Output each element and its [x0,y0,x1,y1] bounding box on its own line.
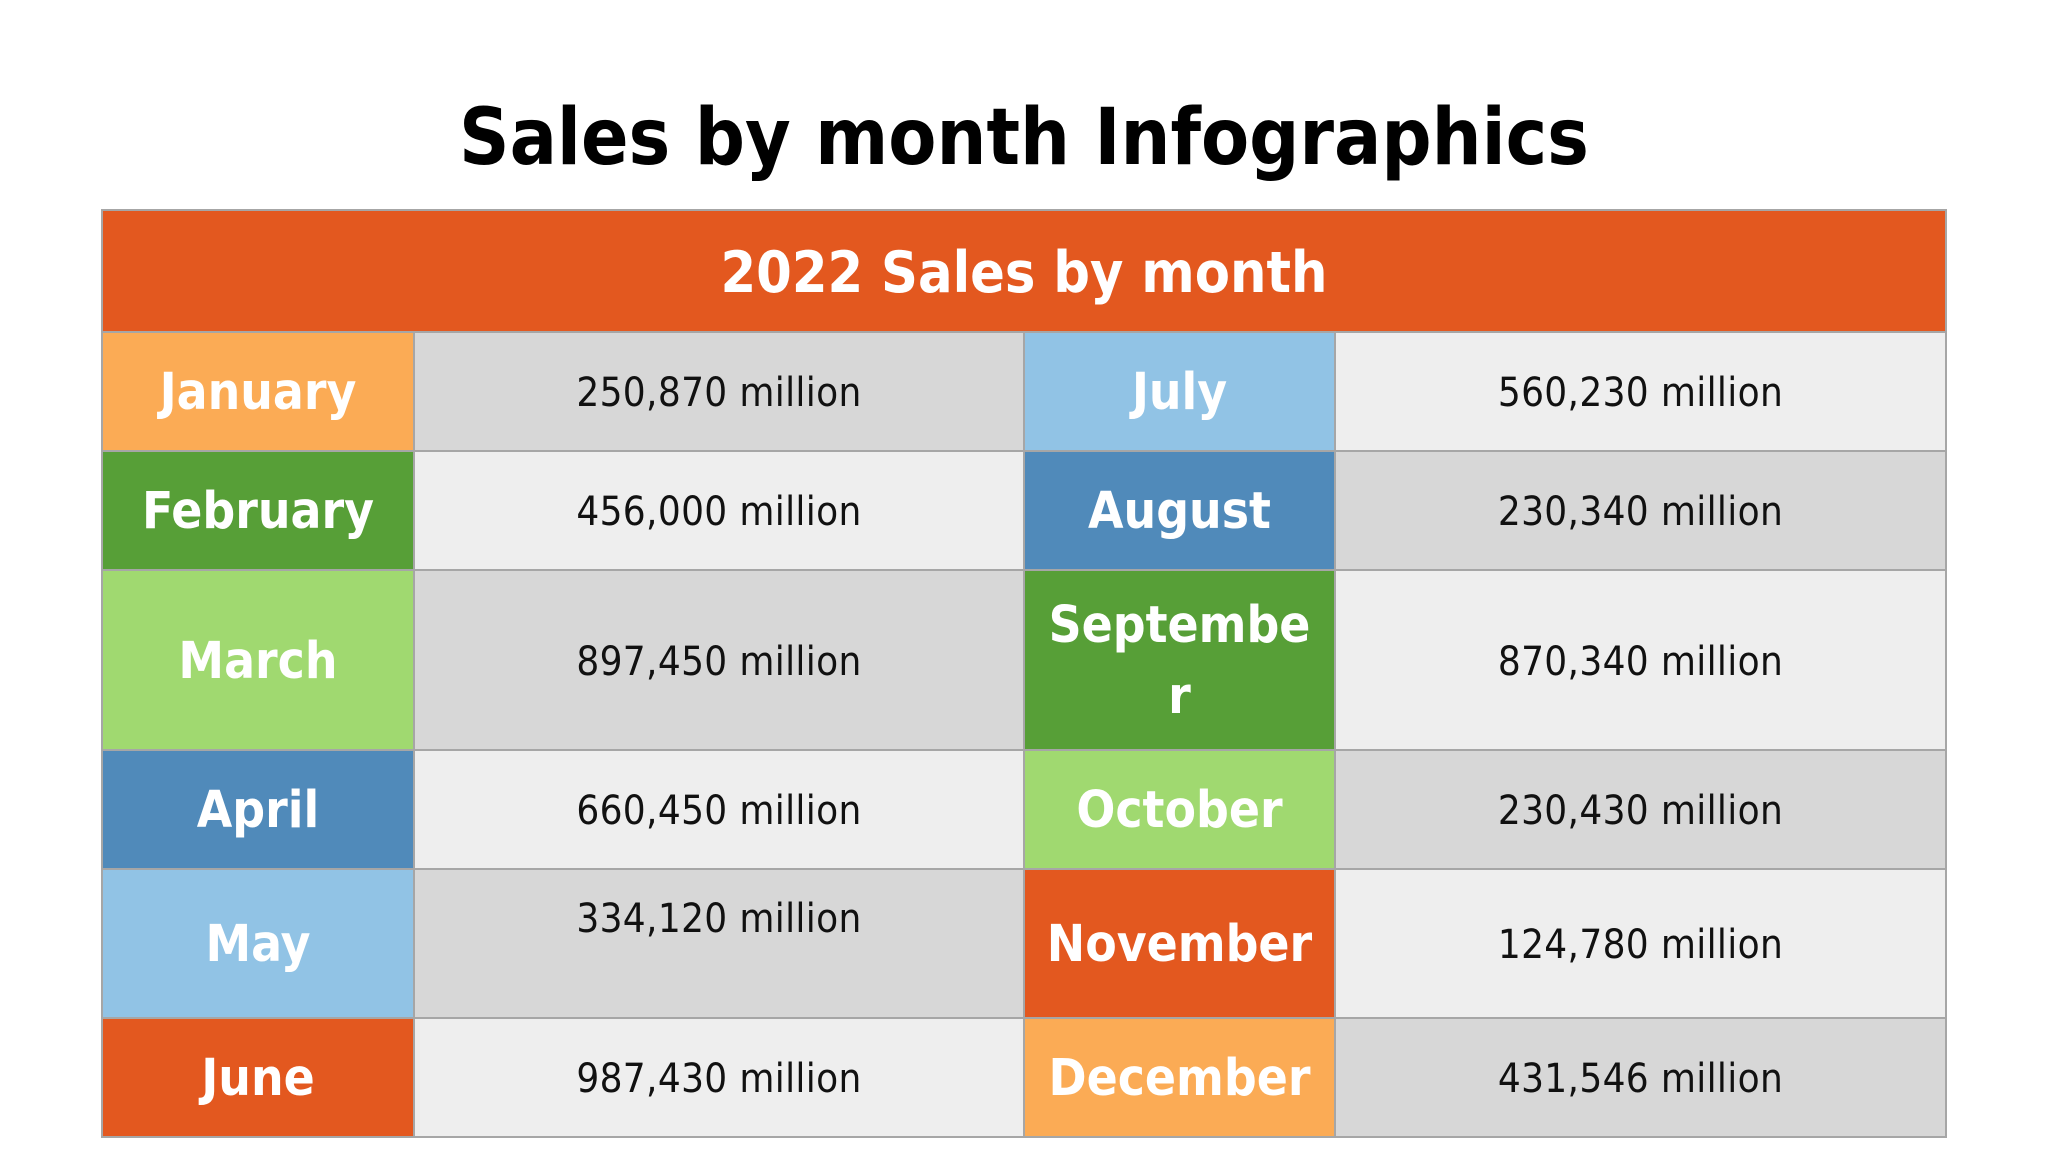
value: July [1336,333,1945,450]
month: October: October [1076,781,1283,840]
month: May [103,870,413,1017]
month: January [103,333,413,450]
month: March: March [178,632,338,690]
value: December: 431,546 million [1498,1056,1783,1102]
month: September: r [1168,667,1191,726]
month: February: February [142,482,374,541]
month: March [103,571,413,749]
month: April: April [197,781,319,840]
value: June [415,1019,1023,1136]
value: October: 230,430 million [1498,788,1783,834]
value: February [415,452,1023,569]
month: August [1025,452,1334,569]
month: July: July [1132,363,1227,422]
month: April [103,751,413,868]
value: February: 456,000 million [576,489,862,535]
month: May: May [206,915,310,974]
month: December [1025,1019,1334,1136]
value: May (top aligned): 334,120 million [576,896,862,942]
month: September: Septembe [1049,596,1310,655]
value: December [1336,1019,1945,1136]
title: Sales by month Infographics [459,93,1589,183]
month: January: January [160,363,356,422]
value: March [415,571,1023,749]
value: March: 897,450 million [576,638,862,684]
month: July [1025,333,1334,450]
month: February [103,452,413,569]
month: June: June [201,1049,315,1108]
table header: 2022 Sales by month [720,240,1328,306]
value: April: 660,450 million [576,788,862,834]
value: November: 124,780 million [1498,922,1783,968]
month: September [1025,571,1334,749]
month: October [1025,751,1334,868]
value: April [415,751,1023,868]
value: September: 870,340 million [1498,638,1783,684]
value: January: 250,870 million [576,370,862,416]
value: June: 987,430 million [576,1056,862,1102]
value: January [415,333,1023,450]
value: August: 230,340 million [1498,489,1783,535]
value: October [1336,751,1945,868]
month: November [1025,870,1334,1017]
month: December: December [1048,1049,1310,1108]
panel: sales table [101,209,1947,1138]
value: September [1336,571,1945,749]
value: August [1336,452,1945,569]
month: June [103,1019,413,1136]
value: May (top aligned) [415,870,1023,1017]
month: November: November [1047,915,1312,974]
value: November [1336,870,1945,1017]
month: August: August [1088,482,1271,541]
value: July: 560,230 million [1498,370,1783,416]
table header [103,211,1945,331]
